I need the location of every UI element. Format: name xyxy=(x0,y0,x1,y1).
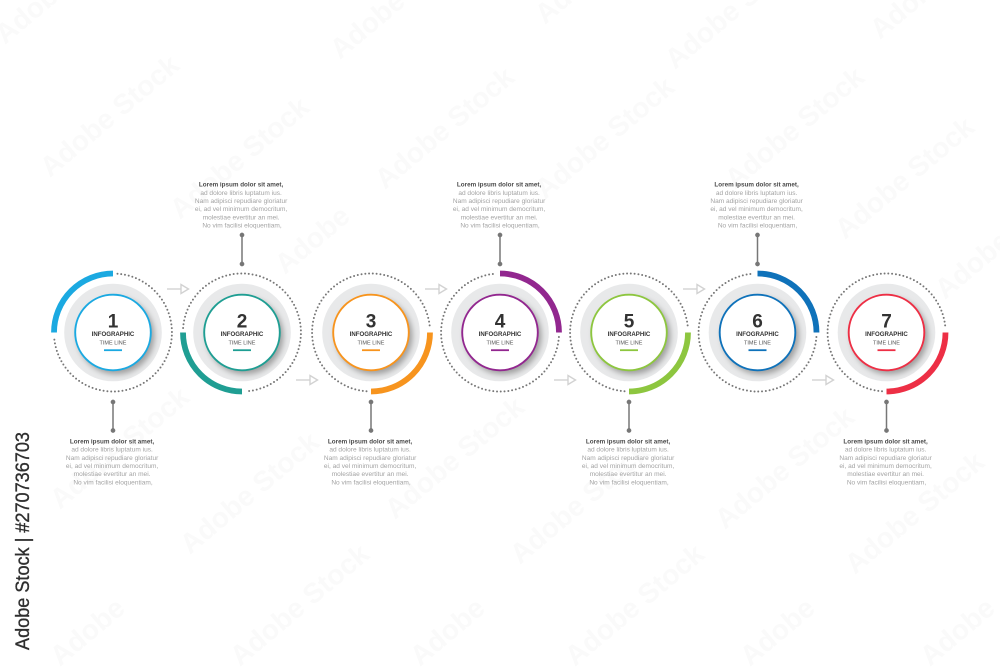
text block 4: Nam adipisci repudiare gloriatur xyxy=(453,198,546,205)
coloured arc 3 xyxy=(371,332,430,392)
text block 5: Lorem ipsum dolor sit amet, xyxy=(586,438,670,445)
text block 4: ad dolore libris luptatum ius. xyxy=(458,190,540,197)
coloured arc 2 xyxy=(183,332,242,392)
background watermark: Adobe Stock xyxy=(44,381,195,515)
dotted ring 6 xyxy=(699,274,816,392)
grey disc 4 xyxy=(451,284,549,381)
shadow 2 xyxy=(206,298,284,374)
text block 4: ei, ad vel minimum democritum, xyxy=(453,206,545,213)
background watermark: Adobe Stock xyxy=(369,61,520,195)
coloured arc 7 xyxy=(886,332,946,392)
shadow 7 xyxy=(851,298,928,374)
text block 2: Nam adipisci repudiare gloriatur xyxy=(195,198,288,205)
text block 6: molestiae evertitur an mei. xyxy=(718,214,795,221)
text block 6: ei, ad vel minimum democritum, xyxy=(710,206,803,213)
number 3: 3 xyxy=(366,312,376,332)
background watermark: Adobe Stock xyxy=(504,436,655,570)
sublabel 7: TIME LINE xyxy=(873,340,900,346)
connector 3 xyxy=(369,400,373,432)
underline 1 xyxy=(104,349,122,351)
coloured arc 1 xyxy=(54,274,113,332)
text block 3: ei, ad vel minimum democritum, xyxy=(324,463,416,470)
sublabel 1: TIME LINE xyxy=(100,340,127,346)
sublabel 2: TIME LINE xyxy=(229,340,256,346)
label 4: INFOGRAPHIC xyxy=(479,331,522,338)
sublabel 3: TIME LINE xyxy=(358,340,385,346)
text block 3: ad dolore libris luptatum ius. xyxy=(329,447,411,454)
connector 1 xyxy=(111,400,115,432)
text block 6: ad dolore libris luptatum ius. xyxy=(716,190,798,197)
text block 7: ei, ad vel minimum democritum, xyxy=(839,463,932,470)
background watermark: Adobe Stock xyxy=(174,426,325,560)
grey disc 5 xyxy=(580,284,678,381)
text block 7: Lorem ipsum dolor sit amet, xyxy=(843,438,928,445)
grey disc 7 xyxy=(838,284,935,381)
text block 5: molestiae evertitur an mei. xyxy=(590,471,667,478)
text block 2: ad dolore libris luptatum ius. xyxy=(200,190,282,197)
label 5: INFOGRAPHIC xyxy=(608,331,651,338)
label 7: INFOGRAPHIC xyxy=(865,331,908,338)
step 7 xyxy=(828,273,946,392)
text block 3: Nam adipisci repudiare gloriatur xyxy=(324,455,417,462)
step 3 xyxy=(312,273,430,392)
text block 6: No vim facilisi eloquentiam, xyxy=(718,223,797,230)
text block 5: ei, ad vel minimum democritum, xyxy=(582,463,674,470)
underline 6 xyxy=(748,349,766,351)
label 2: INFOGRAPHIC xyxy=(221,331,264,338)
number 7: 7 xyxy=(881,312,892,332)
inner circle 2 xyxy=(204,295,280,370)
text block 7: Nam adipisci repudiare gloriatur xyxy=(839,455,933,462)
text block 7: No vim facilisi eloquentiam, xyxy=(847,479,926,486)
arrow 4 to 5 xyxy=(554,376,576,384)
grey disc 2 xyxy=(193,284,291,381)
text block 1: Lorem ipsum dolor sit amet, xyxy=(70,438,154,445)
number 4: 4 xyxy=(495,312,506,332)
connector 4 xyxy=(498,233,502,266)
label 6: INFOGRAPHIC xyxy=(736,331,779,338)
dotted ring 5 xyxy=(570,273,688,391)
inner circle 3 xyxy=(333,295,409,370)
background watermark: Adobe Stock xyxy=(34,49,185,183)
inner circle 7 xyxy=(849,295,924,370)
sublabel 5: TIME LINE xyxy=(616,340,643,346)
connector 2 xyxy=(240,233,244,266)
coloured arc 4 xyxy=(500,274,559,332)
number 6: 6 xyxy=(752,312,763,332)
text block 4: No vim facilisi eloquentiam, xyxy=(460,223,540,230)
text block 2: molestiae evertitur an mei. xyxy=(203,214,280,221)
dotted ring 3 xyxy=(312,273,430,391)
text block 2: ei, ad vel minimum democritum, xyxy=(195,206,287,213)
label 1: INFOGRAPHIC xyxy=(92,331,135,338)
text block 3: molestiae evertitur an mei. xyxy=(332,471,409,478)
arrow 2 to 3 xyxy=(296,376,318,384)
text block 7: molestiae evertitur an mei. xyxy=(847,471,924,478)
shadow 1 xyxy=(78,298,154,374)
text block 3: Lorem ipsum dolor sit amet, xyxy=(328,438,412,445)
underline 5 xyxy=(620,349,638,351)
background watermark: Adobe Stock xyxy=(164,91,315,225)
shadow 5 xyxy=(594,298,670,374)
text block 5: ad dolore libris luptatum ius. xyxy=(587,447,669,454)
inner circle 4 xyxy=(462,295,538,370)
number 1: 1 xyxy=(108,312,119,332)
grey disc 3 xyxy=(322,284,420,381)
coloured arc 6 xyxy=(758,274,816,332)
sublabel 6: TIME LINE xyxy=(744,340,771,346)
step 5 xyxy=(570,273,688,392)
connector 5 xyxy=(627,400,631,432)
background watermark: Adobe Stock xyxy=(719,61,870,195)
text block 4: Lorem ipsum dolor sit amet, xyxy=(457,182,541,189)
text block 1: No vim facilisi eloquentiam, xyxy=(73,479,153,486)
text block 4: molestiae evertitur an mei. xyxy=(461,214,538,221)
shadow 3 xyxy=(336,298,412,374)
background watermark: Adobe Stock xyxy=(839,446,990,580)
connector 7 xyxy=(885,400,888,432)
shadow 6 xyxy=(722,298,799,374)
text block 7: ad dolore libris luptatum ius. xyxy=(845,447,927,454)
number 5: 5 xyxy=(624,312,635,332)
text block 2: No vim facilisi eloquentiam, xyxy=(202,223,282,230)
number 2: 2 xyxy=(237,312,247,332)
background watermark: Adobe Stock xyxy=(829,111,980,245)
background watermark: Adobe Stock xyxy=(379,391,530,525)
background watermark: Adobe xyxy=(269,200,356,280)
text block 5: No vim facilisi eloquentiam, xyxy=(589,479,669,486)
inner circle 5 xyxy=(591,295,667,370)
text block 1: ad dolore libris luptatum ius. xyxy=(71,447,153,454)
grey disc 6 xyxy=(709,284,806,381)
grey disc 1 xyxy=(64,284,162,381)
inner circle 1 xyxy=(75,295,151,370)
arrow 5 to 6 xyxy=(683,284,704,294)
underline 7 xyxy=(878,349,896,351)
text block 6: Lorem ipsum dolor sit amet, xyxy=(714,182,799,189)
underline 4 xyxy=(491,349,509,351)
underline 2 xyxy=(233,349,251,351)
step 6 xyxy=(699,274,816,392)
dotted ring 1 xyxy=(54,274,172,392)
text block 1: ei, ad vel minimum democritum, xyxy=(66,463,158,470)
text block 5: Nam adipisci repudiare gloriatur xyxy=(582,455,675,462)
inner circle 6 xyxy=(720,295,795,370)
coloured arc 5 xyxy=(629,332,688,392)
arrow 3 to 4 xyxy=(425,284,446,294)
background watermark: Adobe Stock xyxy=(529,71,680,205)
background watermark: Adobe Stock xyxy=(709,401,860,535)
stock id side label: Adobe Stock | #270736703 xyxy=(12,432,34,650)
dotted ring 4 xyxy=(441,274,559,392)
text block 1: molestiae evertitur an mei. xyxy=(74,471,151,478)
text block 3: No vim facilisi eloquentiam, xyxy=(331,479,411,486)
dotted ring 2 xyxy=(183,273,301,391)
text block 6: Nam adipisci repudiare gloriatur xyxy=(710,198,804,205)
arrow 6 to 7 xyxy=(812,376,834,384)
underline 3 xyxy=(362,349,380,351)
arrow 1 to 2 xyxy=(167,284,188,294)
step 4 xyxy=(441,274,559,392)
text block 1: Nam adipisci repudiare gloriatur xyxy=(66,455,159,462)
label 3: INFOGRAPHIC xyxy=(350,331,393,338)
shadow 4 xyxy=(464,298,542,374)
step 2 xyxy=(183,273,301,392)
connector 6 xyxy=(756,233,759,266)
step 1 xyxy=(54,274,172,392)
dotted ring 7 xyxy=(828,273,945,391)
text block 2: Lorem ipsum dolor sit amet, xyxy=(199,182,283,189)
sublabel 4: TIME LINE xyxy=(487,340,514,346)
